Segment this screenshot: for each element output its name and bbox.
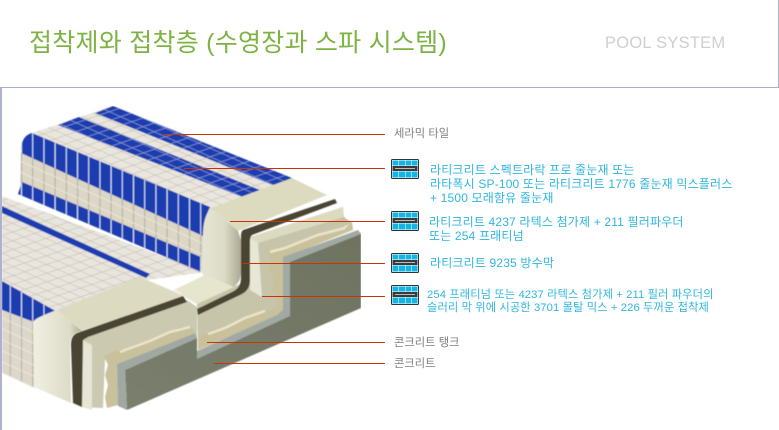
header panel xyxy=(0,0,779,88)
concrete block xyxy=(117,230,361,410)
subtitle: pool system: POOL SYSTEM xyxy=(605,34,725,52)
lower cap end xyxy=(33,277,187,407)
text: latex additive: 라티크리트 4237 라텍스 첨가제 + 211 필러파우더 xyxy=(429,215,684,229)
text: slurry and mortar: 슬러리 막 위에 시공한 3701 몰탈 믹스 + 226 두꺼운 접착제 xyxy=(427,302,709,314)
blue stripe middle xyxy=(58,117,265,200)
label: ceramic tile: 세라믹 타일 xyxy=(394,128,449,140)
text: grout products xyxy=(430,163,732,205)
mortar rough bed xyxy=(104,222,353,408)
concrete tank: beige layers behind xyxy=(80,207,352,410)
text: latex additive: 또는 254 프래티넘 xyxy=(429,229,524,243)
label: concrete: 콘크리트 xyxy=(394,358,436,370)
leader lines xyxy=(163,134,385,364)
bullnose blue xyxy=(21,133,210,236)
icon: product badge 2 xyxy=(391,211,419,231)
upper beige layer face xyxy=(197,207,352,350)
lower tile face xyxy=(2,310,34,388)
text: grout products: 라타폭시 SP-100 또는 라티크리트 1776 줄눈재 믹스플러스 xyxy=(430,177,732,191)
text: slurry and mortar: 254 프래티넘 또는 4237 라텍스 첨가제 + 211 필러 파우더의 xyxy=(427,289,714,301)
text: slurry and mortar xyxy=(427,288,714,314)
icon: product badge 4 xyxy=(391,285,419,305)
text: latex additive xyxy=(429,215,684,243)
text: waterproofing: 라티크리트 9235 방수막 xyxy=(430,256,554,270)
text: grout products: 라티크리트 스펙트라락 프로 줄눈재 또는 xyxy=(430,163,635,177)
lower bench nose blue xyxy=(2,281,56,388)
trough floor xyxy=(176,275,234,304)
blue stripe back xyxy=(95,106,292,186)
membrane upper xyxy=(197,199,337,315)
upper cap xyxy=(173,178,337,315)
lower beige slab xyxy=(80,300,197,408)
left body border xyxy=(0,88,2,430)
lower pool floor tiles xyxy=(2,196,205,311)
upper beige layer top xyxy=(250,207,344,243)
icon: product badge 1 xyxy=(391,159,419,179)
title: 접착제와 접착층 (수영장과 스파 시스템) xyxy=(29,29,447,57)
floor blue stripe xyxy=(2,206,150,278)
icon: product badge 3 xyxy=(391,253,419,273)
upper bench tile face xyxy=(18,152,205,272)
text: grout products: + 1500 모래함유 줄눈재 xyxy=(430,191,554,205)
upper cap front xyxy=(173,208,241,304)
cove blue xyxy=(18,182,201,272)
upper bench top tiles xyxy=(21,106,292,236)
lower membrane xyxy=(71,296,187,407)
label: concrete tank: 콘크리트 탱크 xyxy=(394,337,460,349)
concrete light edges xyxy=(117,333,197,410)
